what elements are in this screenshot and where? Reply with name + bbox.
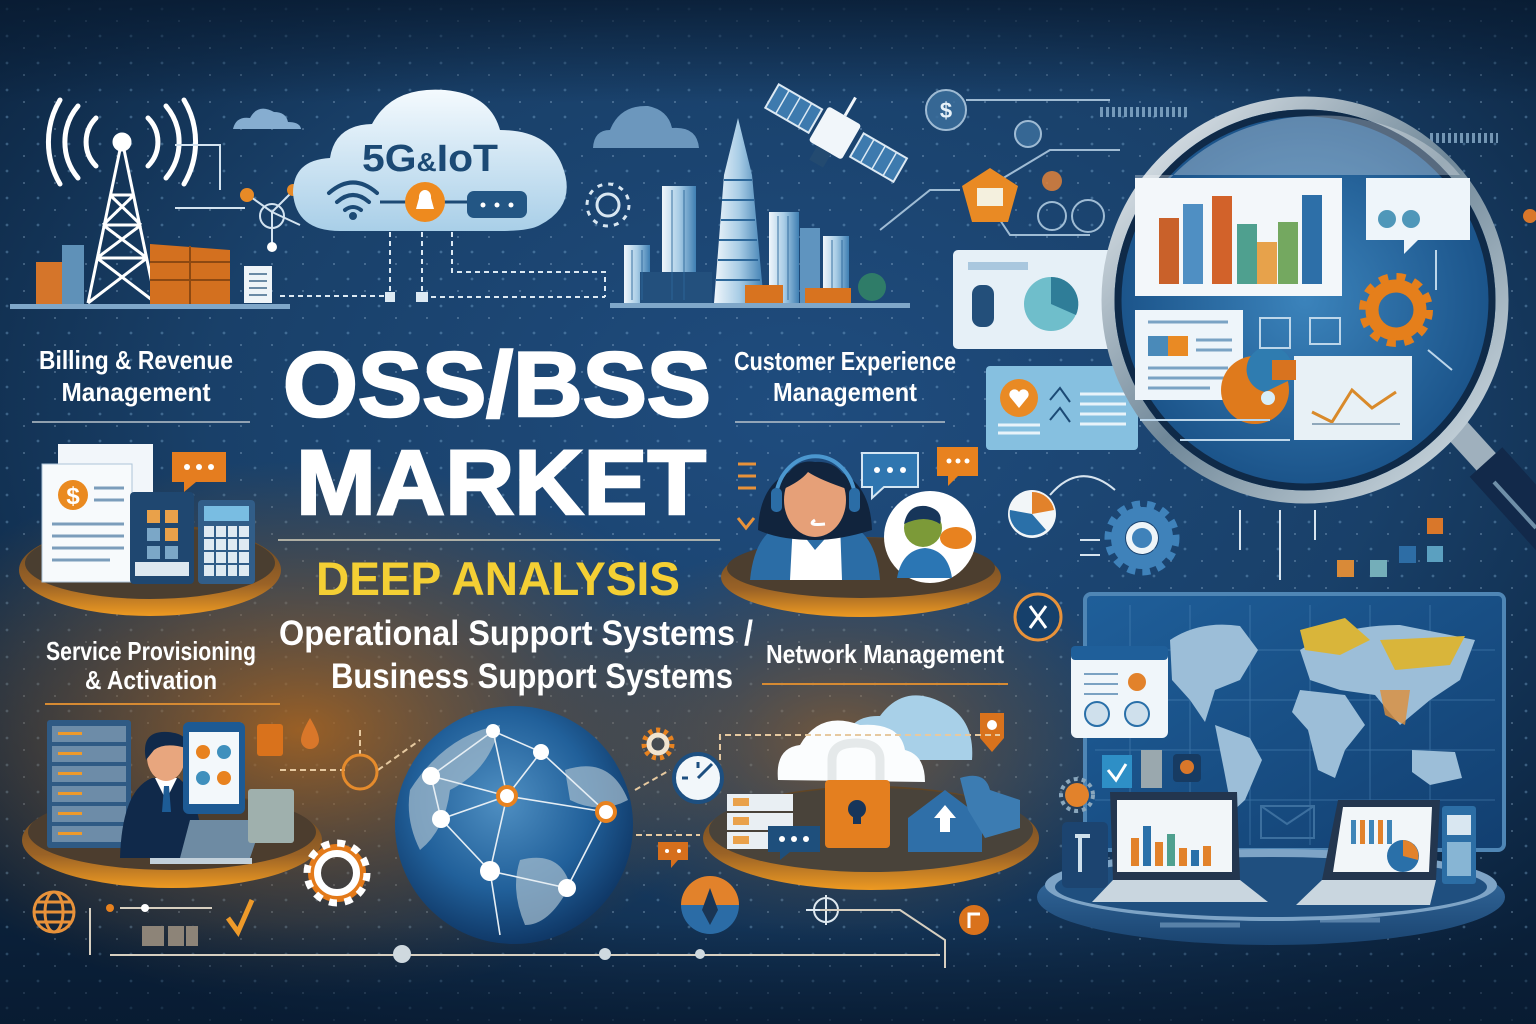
subtitle: deep analysis: DEEP ANALYSIS: [316, 552, 680, 605]
device: [130, 492, 194, 584]
bars bottom left: [142, 926, 198, 946]
highlighted regions: [1300, 618, 1465, 670]
icon: calculator: [198, 500, 255, 584]
lens highlight: [1135, 115, 1460, 225]
description: Operational Support Systems /: [279, 614, 753, 653]
heading: service provisioning: [46, 636, 256, 695]
customer avatar: [884, 491, 976, 583]
network connectors center: [280, 730, 1000, 835]
heading: billing: Billing & Revenue: [39, 345, 233, 375]
icon: badge round: [1015, 594, 1061, 640]
cloud: 5G and IoT: [293, 90, 567, 231]
heading: billing: [39, 345, 233, 407]
icon: orange drop: [301, 718, 319, 749]
icon: chat bubble blue: [862, 453, 918, 498]
heading: service provisioning: Service Provisioning: [46, 636, 256, 666]
icon: small cloud left: [233, 109, 301, 129]
icon: gear tile: [1061, 779, 1093, 811]
floating card: heart: [986, 366, 1138, 450]
magnifying glass: [1108, 103, 1536, 544]
icon: globe orange: [34, 892, 74, 932]
icon: check mark: [228, 900, 252, 932]
icon: phone tile: [1062, 822, 1108, 888]
small tiles: [1102, 750, 1201, 788]
network node left: [175, 145, 300, 252]
icon: gauge clock: [674, 754, 722, 802]
server rack: [47, 720, 131, 848]
puzzle icon: [960, 776, 1020, 838]
tablet: [183, 722, 245, 814]
icon: dollar coin: $: [940, 98, 952, 123]
chat card: [1366, 178, 1470, 254]
dashboard base platform: [1037, 779, 1505, 945]
icon: small cloud right: [593, 106, 699, 148]
lens tech lines: [1140, 250, 1452, 440]
icon: large gear: [307, 843, 367, 903]
server stack: [727, 794, 793, 849]
panel: billing platform: [19, 444, 281, 616]
phones right: [1442, 806, 1476, 884]
orange gear: [1363, 277, 1429, 343]
icon: orange lock tag: [257, 724, 283, 756]
map grid: [1095, 605, 1495, 845]
envelope: [1261, 806, 1314, 838]
skyline left: buildings and containers: [10, 244, 290, 309]
handle: [1450, 422, 1536, 544]
monitor with world map: [1071, 594, 1504, 850]
top right micro bars: [1100, 112, 1498, 138]
floating card: pie: [953, 250, 1113, 349]
icon: chat: [172, 452, 226, 492]
panel: customer experience platform: [721, 447, 1001, 617]
icon: pie chart: [1008, 490, 1056, 538]
heading: network management: Network Management: [766, 639, 1004, 669]
document card: [1135, 310, 1243, 400]
icon: satellite: [754, 61, 920, 202]
heading: service provisioning: & Activation: [85, 665, 217, 695]
icon: chat bubble: [467, 191, 527, 218]
clouds: [844, 695, 972, 760]
icon: small orange gear: [644, 730, 672, 758]
device box: [248, 789, 294, 843]
icon: radio tower: [48, 100, 196, 303]
orange 3d pie: [1221, 346, 1296, 424]
house icon: [908, 790, 982, 852]
engineer: [120, 732, 205, 858]
icon: orange f badge: [959, 905, 989, 935]
document: $: [66, 483, 80, 510]
skyline center city: [610, 118, 910, 308]
title: OSS/BSS: [283, 334, 711, 436]
laptop right: [1296, 800, 1440, 905]
heading: customer experience: Management: [773, 377, 917, 407]
description: Business Support Systems: [331, 657, 733, 696]
title: MARKET: [296, 432, 706, 534]
side ticks: [738, 464, 756, 528]
cloud: 5G and IoT: 5G&IoT: [362, 138, 498, 180]
panel: service provisioning platform: [22, 720, 322, 888]
right mid icons: [1008, 476, 1443, 640]
lock: [825, 743, 890, 848]
orange badge: [980, 713, 1004, 752]
title divider: [278, 539, 720, 541]
description: [279, 614, 753, 696]
icon: compass half dial: [681, 876, 739, 934]
top right circuit: [880, 90, 1120, 235]
arc and lines: [1050, 476, 1315, 580]
icon: blue gear: [1108, 504, 1176, 572]
edge dot: [1523, 209, 1536, 223]
laptop left: [1092, 792, 1268, 902]
laptop: [150, 820, 263, 864]
icon: orange pentagon badge: [962, 168, 1018, 222]
title: [283, 334, 711, 534]
icon: target: [806, 895, 846, 925]
chat bubble: [768, 826, 820, 860]
heading: customer experience: [734, 346, 956, 407]
icon: wifi: [329, 182, 377, 218]
icon: gear outline: [587, 184, 629, 226]
bar chart card: [1135, 178, 1342, 296]
icon: chat orange small: [658, 842, 688, 868]
heading: billing: Management: [62, 377, 211, 407]
card on map: [1071, 646, 1168, 738]
continents: [1170, 625, 1475, 812]
icon: chat bubble orange: [937, 447, 978, 486]
agent: [750, 456, 880, 580]
connection lines below cloud: [280, 232, 605, 302]
panel: network management platform: [703, 695, 1039, 890]
line chart card: [1294, 356, 1412, 440]
document: [42, 444, 153, 582]
globe: [395, 706, 633, 944]
icon: orange user badge: [380, 182, 470, 222]
bottom right base labels: [1160, 920, 1380, 925]
bottom circuit line: [90, 904, 945, 968]
squares: [1337, 518, 1443, 577]
heading: customer experience: Customer Experience: [734, 346, 956, 376]
